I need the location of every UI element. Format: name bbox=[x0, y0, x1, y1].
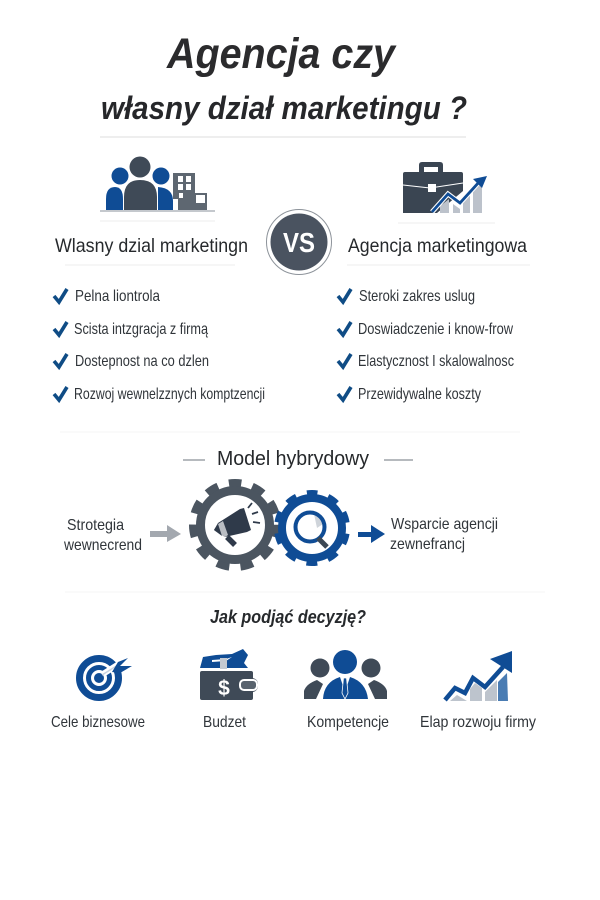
arrow: gray bbox=[150, 525, 181, 542]
icon: briefcase with growth chart bbox=[403, 162, 487, 213]
label: business goals: Cele biznesowe bbox=[51, 714, 145, 731]
vs badge bbox=[266, 210, 332, 274]
icon: target bbox=[80, 658, 132, 698]
icon: in-house team and building bbox=[100, 156, 215, 211]
title: Agencja czy bbox=[166, 30, 397, 78]
icon: wallet bbox=[200, 649, 258, 700]
panel: in-house list: Scista intzgracja z firmą bbox=[74, 321, 208, 338]
text: internal strategy bbox=[63, 517, 142, 554]
text: agency support: zewnefrancj bbox=[390, 536, 465, 553]
vs badge: VS bbox=[283, 227, 315, 258]
panel: agency list: Przewidywalne koszty bbox=[358, 386, 481, 403]
title bbox=[101, 30, 467, 126]
text: internal strategy: wewnecrend bbox=[63, 537, 142, 554]
panel: in-house list: Rozwoj wewnelzznych komptzencji bbox=[74, 386, 265, 403]
icon: wallet: $ bbox=[218, 677, 230, 700]
icon: gear with megaphone bbox=[194, 484, 276, 566]
text: agency support bbox=[390, 516, 498, 553]
heading: how to decide: Jak podjąć decyzję? bbox=[210, 607, 366, 627]
arrow: blue bbox=[358, 525, 385, 543]
text: agency support: Wsparcie agencji bbox=[391, 516, 498, 533]
panel: agency list bbox=[338, 288, 514, 403]
panel: agency list: Steroki zakres uslug bbox=[359, 288, 475, 305]
label: budget: Budzet bbox=[203, 714, 246, 731]
panel: agency list: Elastycznost I skalowalnosc bbox=[358, 353, 514, 370]
heading: agency: Agencja marketingowa bbox=[348, 235, 527, 257]
panel: agency list: Doswiadczenie i know-frow bbox=[358, 321, 513, 338]
heading: in-house: Wlasny dzial marketingn bbox=[55, 235, 248, 257]
panel: in-house list bbox=[54, 288, 265, 403]
text: internal strategy: Strotegia bbox=[67, 517, 124, 534]
panel: in-house list: Dostepnost na co dzlen bbox=[75, 353, 209, 370]
title: własny dział marketingu ? bbox=[101, 90, 467, 126]
icon: gear with magnifier bbox=[278, 494, 346, 562]
label: competences: Kompetencje bbox=[307, 714, 389, 731]
label: growth stage: Elap rozwoju firmy bbox=[420, 714, 536, 731]
heading: hybrid model: Model hybrydowy bbox=[217, 447, 370, 470]
panel: in-house list: Pelna liontrola bbox=[75, 288, 160, 305]
icon: team bbox=[304, 650, 387, 699]
icon: growth chart bbox=[445, 651, 512, 701]
